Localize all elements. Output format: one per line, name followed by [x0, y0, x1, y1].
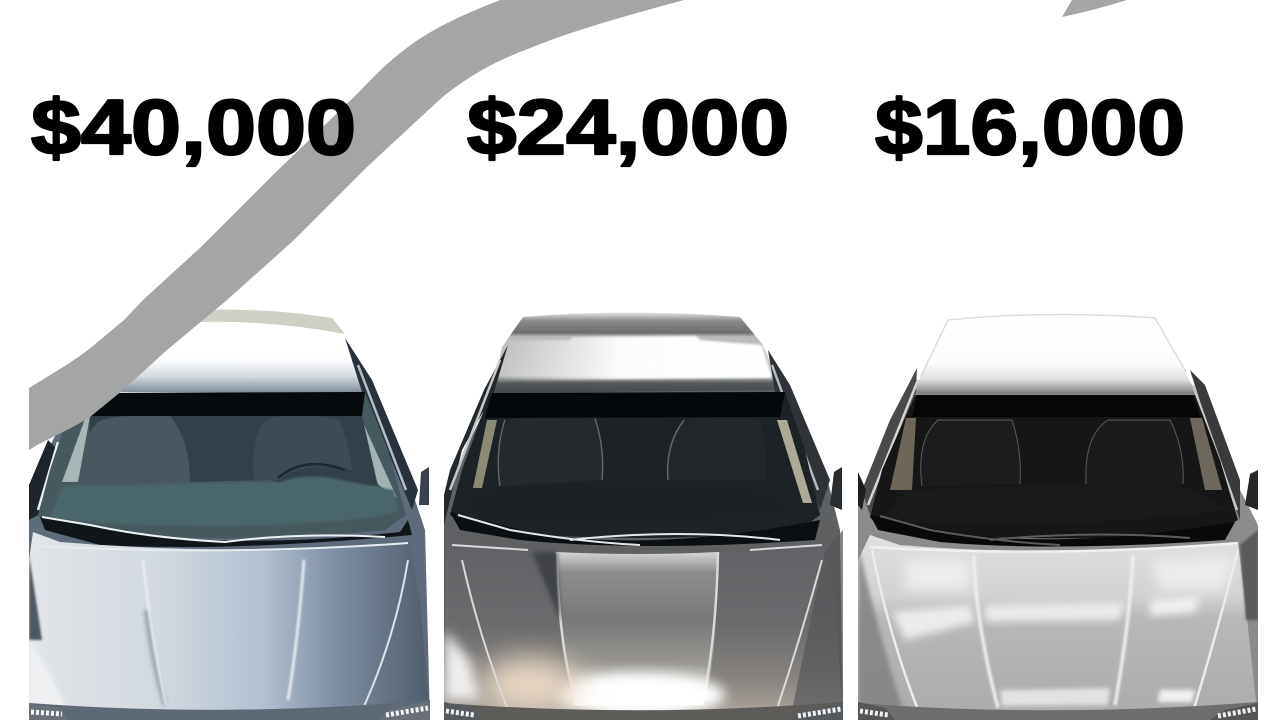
right A-pillar	[1190, 370, 1240, 520]
wipers and cowl	[450, 512, 820, 546]
hood highlight top	[870, 543, 1238, 552]
hood creases	[974, 555, 1133, 708]
roof	[120, 362, 362, 392]
windshield	[870, 395, 1238, 539]
bumper strip	[858, 702, 1258, 720]
hood upper highlights	[452, 545, 822, 550]
car body side panels	[858, 392, 1258, 720]
windshield	[450, 392, 820, 538]
right A-pillar	[768, 350, 830, 510]
windshield sun band	[485, 392, 785, 418]
left A-pillar	[444, 345, 508, 525]
seats	[88, 416, 378, 486]
side glass highlights	[473, 420, 497, 488]
panel: car at $40,000	[29, 310, 430, 720]
arrow: ribbon fragment top right	[1062, 0, 1127, 17]
left A-pillar	[862, 368, 917, 515]
hood bottom glare	[555, 673, 725, 717]
dashboard	[465, 481, 812, 523]
left headlight	[858, 702, 895, 720]
hood centre panel	[557, 552, 718, 705]
seats	[500, 416, 603, 486]
right headlight	[790, 703, 843, 720]
dashboard	[50, 477, 398, 526]
left A-pillar	[29, 440, 58, 520]
right headlight	[378, 702, 430, 720]
left headlight	[444, 702, 480, 720]
panel: car at $16,000	[858, 314, 1258, 720]
roof outline	[920, 314, 1186, 378]
hood right crease	[288, 560, 304, 700]
right fender line	[364, 560, 409, 705]
wipers and cowl	[40, 517, 412, 547]
crease shadow	[532, 552, 560, 620]
windshield sun band	[912, 395, 1200, 417]
heading: price $40,000: $40,000	[31, 83, 356, 171]
hood upper highlight	[36, 543, 408, 550]
bumper strip	[444, 702, 843, 720]
reflection patches	[892, 605, 975, 640]
hood left crease	[146, 610, 165, 705]
hood	[29, 532, 430, 720]
left fender	[29, 555, 42, 640]
right A-pillar	[345, 338, 418, 510]
windshield sun band	[91, 392, 365, 416]
panel: car at $24,000	[444, 312, 843, 720]
wipers and cowl	[870, 515, 1235, 547]
panel outline	[557, 552, 718, 700]
fender lines	[462, 560, 822, 715]
left mirror	[858, 472, 866, 510]
roof	[493, 312, 781, 393]
bumper strip	[29, 700, 430, 720]
side glass highlights	[62, 416, 90, 482]
hood	[444, 594, 842, 710]
heading: price $16,000: $16,000	[875, 83, 1185, 171]
car body side panels	[29, 432, 430, 700]
left fender reflection	[444, 630, 480, 700]
roof glare panel	[496, 336, 772, 380]
left headlight	[29, 704, 68, 720]
car body side panels	[444, 388, 843, 720]
seats	[921, 420, 1020, 486]
roof rear edge	[195, 310, 345, 334]
left fender dark	[858, 545, 905, 715]
right mirror	[419, 467, 429, 505]
roof	[912, 314, 1197, 394]
heading: price $24,000: $24,000	[467, 83, 789, 171]
lower right patch	[1158, 690, 1195, 702]
side glass highlights	[890, 418, 916, 490]
right fender dark	[790, 530, 843, 720]
arrow: declining value ribbon	[29, 0, 684, 450]
windshield	[38, 392, 406, 539]
right fender dark	[1240, 530, 1258, 620]
right mirror	[830, 467, 842, 510]
hood	[858, 535, 1258, 720]
dashboard	[880, 481, 1230, 524]
right mirror	[1245, 470, 1258, 510]
lower centre bright strip	[1000, 688, 1110, 706]
right headlight	[1210, 703, 1258, 720]
fender lines	[872, 550, 1238, 715]
